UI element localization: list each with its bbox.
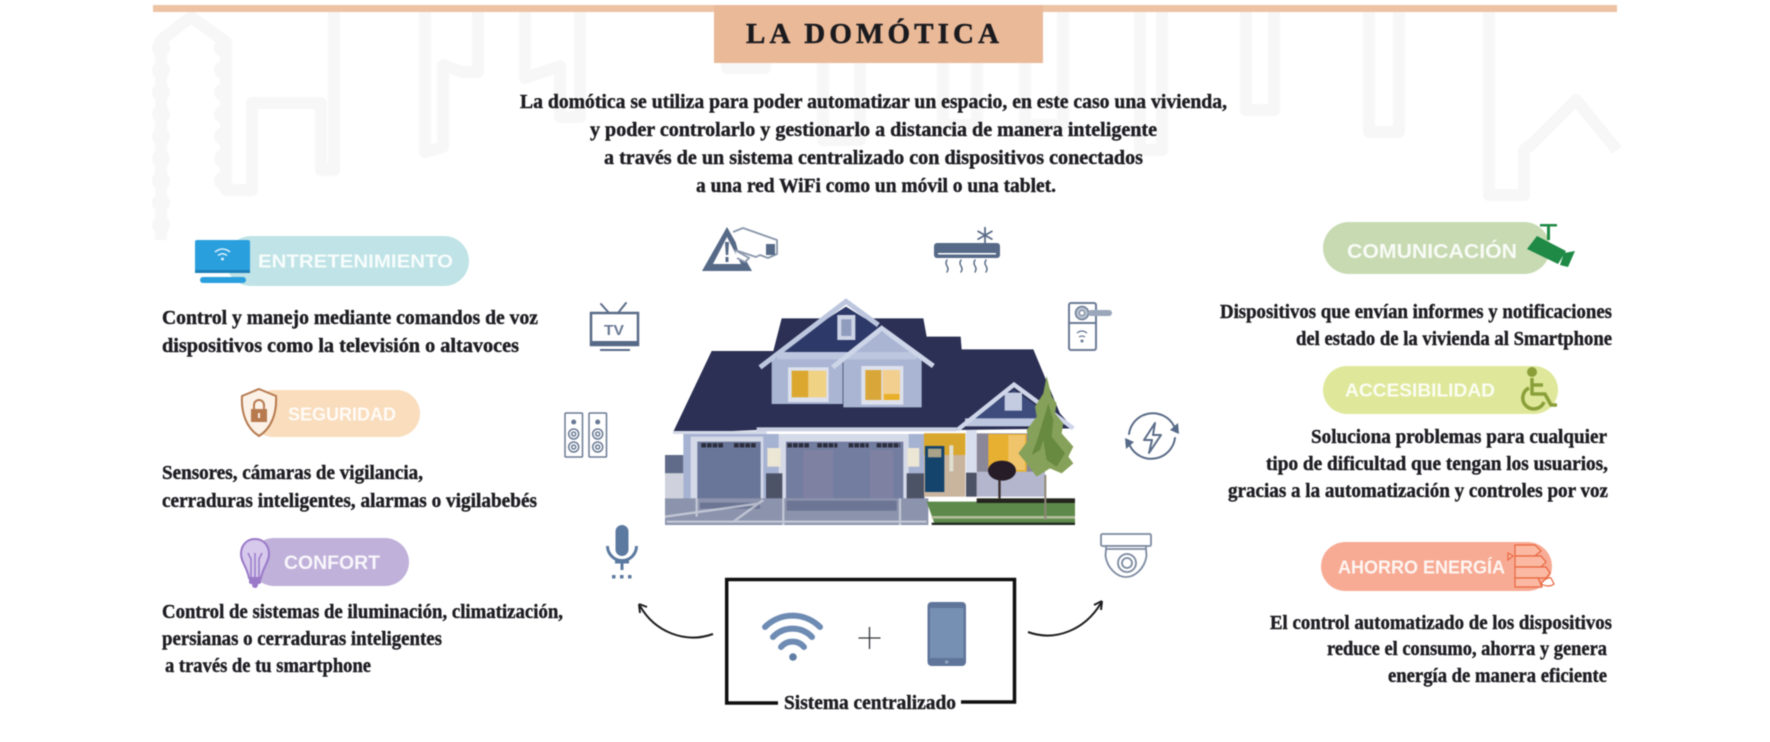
text: confort: persianas o cerraduras inteligentes	[162, 629, 442, 650]
pill: entretenimiento: ENTRETENIMIENTO	[258, 252, 453, 272]
icon: smart lock	[1069, 303, 1112, 350]
pill: accesibilidad: ACCESIBILIDAD	[1345, 380, 1495, 400]
pill: comunicación	[1323, 222, 1550, 274]
text: seguridad	[162, 463, 537, 512]
icon: light bulb	[241, 539, 269, 588]
text: entretenimiento	[162, 308, 538, 357]
box frame	[727, 580, 1014, 703]
label: sistema centralizado: Sistema centralizado	[784, 693, 956, 714]
icon: energy cycle	[1125, 413, 1179, 459]
pill: entretenimiento	[226, 236, 469, 286]
text: comunicación: del estado de la vivienda al Smartphone	[1296, 329, 1612, 350]
text: confort: a través de tu smartphone	[165, 656, 371, 677]
panel: entretenimiento	[162, 236, 538, 357]
icon: shield	[242, 389, 276, 436]
icon: plus	[858, 627, 880, 649]
panel: confort	[162, 538, 563, 677]
text: ahorro energía: reduce el consumo, ahorra y genera	[1327, 639, 1607, 660]
intro text: y poder controlarlo y gestionarlo a distancia de manera inteligente	[590, 120, 1157, 141]
text: ahorro energía: energía de manera eficiente	[1388, 666, 1607, 687]
icon: warning camera	[702, 227, 777, 271]
intro text	[520, 92, 1227, 197]
pill: confort	[250, 538, 409, 586]
text: confort: Control de sistemas de iluminación, climatización,	[162, 602, 563, 623]
icon: smartphone	[928, 602, 966, 666]
text: confort	[162, 602, 563, 677]
icon: microphone	[608, 525, 636, 578]
text: ahorro energía: El control automatizado de los dispositivos	[1270, 613, 1612, 634]
panel: seguridad	[162, 389, 537, 512]
pill: seguridad	[250, 390, 420, 437]
panel: sistema centralizado	[727, 580, 1014, 714]
icon: smart tv	[195, 240, 250, 283]
panel: ahorro energía	[1270, 542, 1612, 687]
text: accesibilidad: gracias a la automatización y controles por voz	[1228, 481, 1608, 502]
text: seguridad: Sensores, cámaras de vigilancia,	[162, 463, 423, 484]
icon: security camera	[1527, 224, 1575, 267]
pill: seguridad: SEGURIDAD	[288, 404, 396, 424]
icon: tv: TV	[604, 322, 624, 339]
icon: wifi	[765, 616, 820, 661]
icon: energy rating	[1508, 545, 1554, 587]
intro text: a una red WiFi como un móvil o una tablet.	[696, 176, 1056, 197]
text: accesibilidad	[1228, 427, 1608, 502]
text: ahorro energía	[1270, 613, 1612, 687]
icon: wheelchair	[1523, 367, 1557, 409]
text: seguridad: cerraduras inteligentes, alarmas o vigilabebés	[162, 491, 537, 512]
text: accesibilidad: tipo de dificultad que tengan los usuarios,	[1266, 454, 1608, 475]
pill: ahorro energía	[1321, 542, 1552, 591]
text: entretenimiento: Control y manejo mediante comandos de voz	[162, 308, 538, 329]
top bar	[153, 5, 1617, 12]
intro text: a través de un sistema centralizado con dispositivos conectados	[604, 148, 1143, 169]
text: comunicación: Dispositivos que envían informes y notificaciones	[1220, 302, 1612, 323]
panel: accesibilidad	[1228, 366, 1608, 502]
icon: tv	[590, 303, 638, 351]
pill: accesibilidad	[1323, 366, 1558, 414]
arrow: left	[639, 604, 713, 638]
title: LA DOMÓTICA	[746, 17, 999, 50]
text: entretenimiento: dispositivos como la televisión o altavoces	[162, 336, 519, 357]
text: comunicación	[1220, 302, 1612, 350]
pill: comunicación: COMUNICACIÓN	[1347, 239, 1517, 263]
icon: dome camera	[1101, 534, 1151, 577]
arrow: right	[1028, 601, 1102, 635]
pill: confort: CONFORT	[284, 553, 380, 574]
title	[714, 5, 1043, 63]
intro text: La domótica se utiliza para poder automatizar un espacio, en este caso una vivienda,	[520, 92, 1227, 113]
icon: air conditioner	[934, 227, 1000, 272]
panel: comunicación	[1220, 222, 1612, 350]
pill: ahorro energía: AHORRO ENERGÍA	[1338, 556, 1505, 578]
icon: speakers	[565, 413, 606, 457]
house illustration	[665, 301, 1075, 525]
text: accesibilidad: Soluciona problemas para cualquier	[1311, 427, 1607, 448]
